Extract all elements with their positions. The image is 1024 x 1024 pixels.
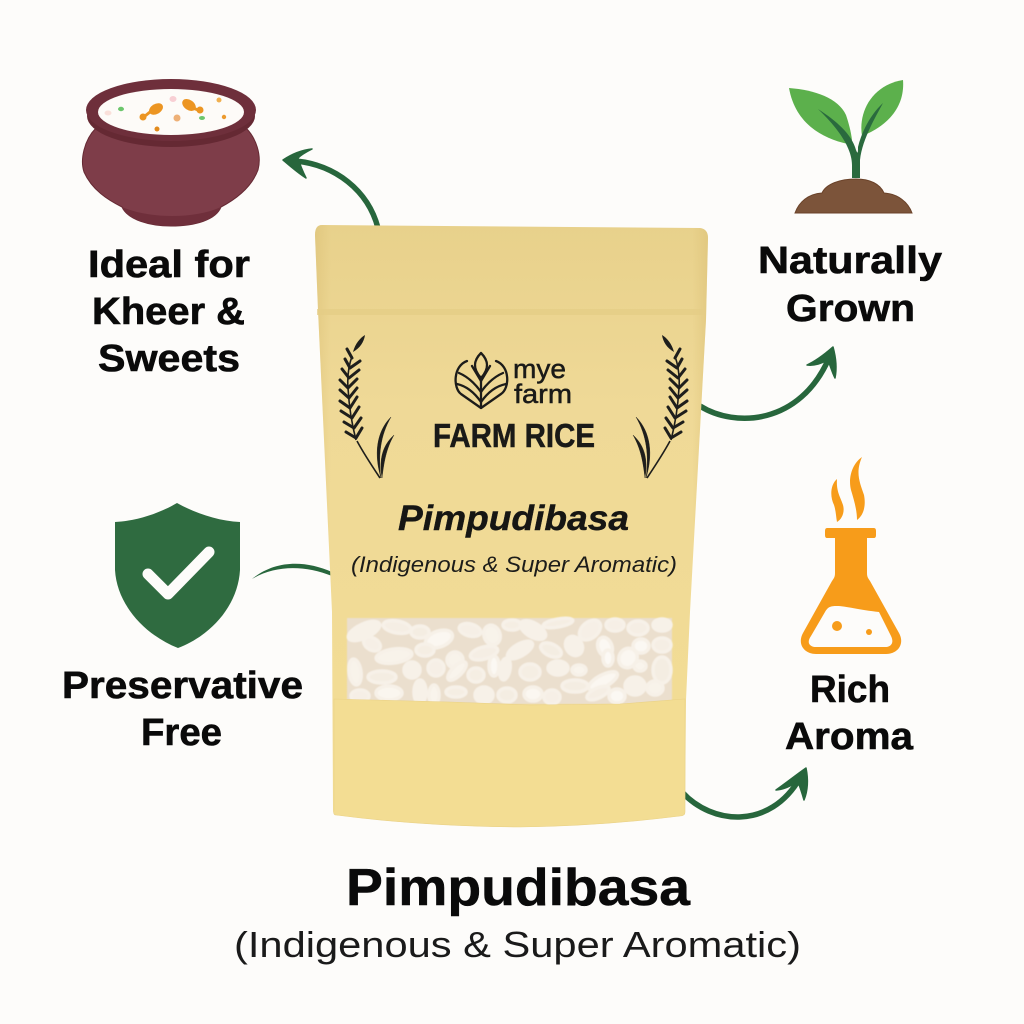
brand name: mye — [513, 354, 566, 384]
arrow: bag to preservative free — [252, 564, 332, 579]
label: rich aroma: Rich — [810, 669, 890, 711]
zip seal — [317, 309, 706, 315]
lower pouch panel — [334, 699, 685, 827]
label: rich aroma — [785, 669, 914, 758]
arrow: bag to kheer — [283, 149, 378, 228]
title: Pimpudibasa — [346, 859, 691, 917]
product pouch — [315, 225, 708, 827]
icon: sprout — [789, 80, 912, 213]
rice window — [346, 616, 672, 705]
icon: kheer pot — [82, 79, 259, 226]
pouch body — [315, 225, 708, 827]
label: variety description: (Indigenous & Super Aromatic) — [351, 552, 677, 577]
label: ideal for kheer and sweets — [88, 244, 250, 380]
wheat right — [633, 335, 687, 478]
icon: shield with check — [115, 503, 240, 648]
label: ideal for kheer and sweets: Ideal for — [88, 244, 250, 286]
label: naturally grown — [758, 240, 942, 330]
label: ideal for kheer and sweets: Kheer & — [92, 291, 245, 333]
brand logo: leaf — [456, 353, 507, 408]
brand name: farm — [514, 379, 572, 409]
label: preservative free — [62, 665, 303, 754]
brand name — [513, 354, 572, 409]
arrow: bag to rich aroma — [682, 768, 807, 817]
label: rich aroma: Aroma — [785, 716, 914, 758]
label: ideal for kheer and sweets: Sweets — [98, 338, 240, 380]
subtitle: (Indigenous & Super Aromatic) — [234, 924, 801, 965]
label: variety name: Pimpudibasa — [398, 499, 629, 538]
label: preservative free: Preservative — [62, 665, 303, 707]
label: preservative free: Free — [141, 712, 222, 754]
icon: aroma flask — [801, 457, 901, 654]
label: farm rice: FARM RICE — [433, 417, 595, 454]
label: naturally grown: Grown — [786, 288, 915, 330]
wheat left — [340, 335, 394, 478]
label: naturally grown: Naturally — [758, 240, 942, 282]
arrow: bag to naturally grown — [700, 347, 836, 418]
